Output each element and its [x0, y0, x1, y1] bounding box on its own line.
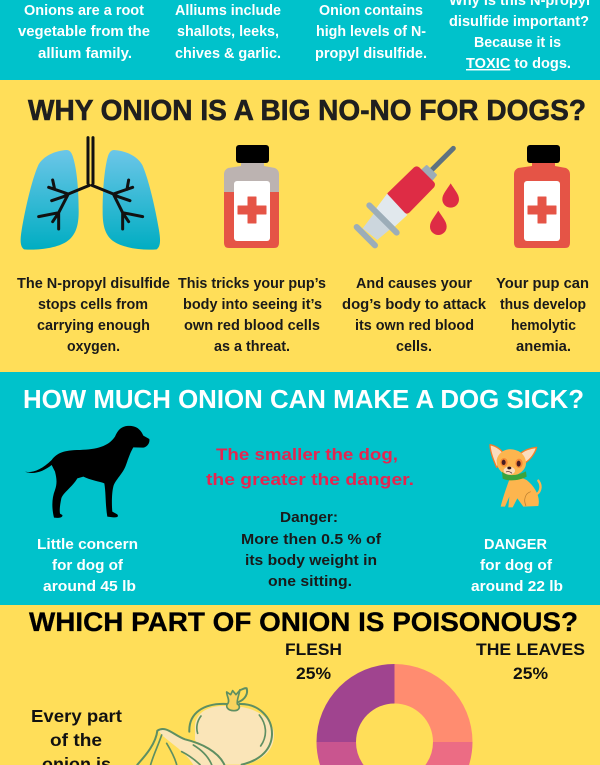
- text: body attacks red blood cells: And causes your: [356, 276, 472, 292]
- text: tricks the body: as a threat.: [214, 339, 290, 355]
- text: every part of the onion: of the: [50, 730, 102, 750]
- label: the leaves 25%: [476, 641, 585, 683]
- text: little concern: for dog of: [52, 558, 123, 574]
- icon: large dog silhouette: [25, 426, 149, 518]
- text: tricks the body: own red blood cells: [184, 318, 320, 334]
- text: danger for small dog: for dog of: [480, 558, 552, 574]
- text: danger amount: its body weight in: [245, 553, 377, 569]
- text: N-propyl disulfide fact: high levels of N-: [316, 24, 426, 40]
- text: stops cells carrying oxygen: carrying enough: [37, 318, 150, 334]
- text: alliums fact: shallots, leeks,: [177, 24, 279, 40]
- text: tricks the body: This tricks your pup’s: [178, 276, 326, 292]
- text: N-propyl disulfide fact: Onion contains: [319, 3, 423, 19]
- text: body attacks red blood cells: dog’s body to attack: [342, 297, 487, 313]
- icon: medicine bottle half full: [224, 145, 279, 248]
- callout: smaller dog greater danger: The smaller the dog,: [216, 445, 398, 464]
- text: alliums fact: Alliums include: [175, 3, 281, 19]
- text: N-propyl disulfide fact: propyl disulfide.: [315, 46, 427, 62]
- text: stops cells carrying oxygen: [17, 276, 170, 355]
- text: hemolytic anemia: [496, 276, 589, 355]
- text: root vegetable fact: [18, 3, 150, 62]
- text: why it is toxic: TOXIC to dogs.: [466, 56, 571, 72]
- text: danger amount: one sitting.: [268, 574, 352, 590]
- panel: how much onion: [0, 372, 600, 605]
- text: root vegetable fact: vegetable from the: [18, 24, 150, 40]
- icon: medicine bottle full: [514, 145, 570, 248]
- label: the leaves 25%: 25%: [513, 665, 548, 683]
- text: tricks the body: body into seeing it’s: [183, 297, 322, 313]
- text: body attacks red blood cells: [342, 276, 487, 355]
- text: root vegetable fact: Onions are a root: [24, 3, 144, 19]
- text: root vegetable fact: allium family.: [38, 46, 132, 62]
- text: hemolytic anemia: hemolytic: [511, 318, 576, 334]
- chart: onion parts donut: [316, 664, 472, 765]
- text: why it is toxic: disulfide important?: [449, 14, 589, 30]
- icon: lungs: [21, 138, 160, 250]
- text: hemolytic anemia: Your pup can: [496, 276, 589, 292]
- text: little concern: [37, 537, 138, 595]
- text: danger for small dog: DANGER: [484, 537, 548, 553]
- callout: smaller dog greater danger: the greater the danger.: [206, 470, 414, 489]
- text: danger amount: Danger:: [280, 510, 338, 526]
- text: little concern: Little concern: [37, 537, 138, 553]
- icon: chihuahua: [490, 445, 541, 507]
- heading: how much onion: HOW MUCH ONION CAN MAKE A DOG SICK?: [23, 384, 584, 414]
- label: flesh 25%: 25%: [296, 665, 331, 683]
- text: why it is toxic: Because it is: [474, 35, 561, 51]
- text: why it is toxic: [449, 0, 590, 72]
- text: danger amount: [241, 510, 381, 590]
- text: stops cells carrying oxygen: stops cells from: [38, 297, 148, 313]
- panel: why onion is bad: [0, 80, 600, 372]
- text: every part of the onion: Every part: [31, 706, 122, 726]
- label: the leaves 25%: THE LEAVES: [476, 641, 585, 659]
- panel: which part is poisonous: [0, 605, 600, 765]
- text: N-propyl disulfide fact: [315, 3, 427, 62]
- text: body attacks red blood cells: cells.: [396, 339, 432, 355]
- text: alliums fact: chives & garlic.: [175, 46, 281, 62]
- label: flesh 25%: FLESH: [285, 641, 342, 659]
- heading: which part of onion: WHICH PART OF ONION IS POISONOUS?: [29, 607, 578, 637]
- icon: syringe with blood drops: [357, 148, 459, 245]
- text: danger for small dog: [471, 537, 563, 595]
- label: flesh 25%: [285, 641, 342, 683]
- callout: smaller dog greater danger: [206, 445, 414, 489]
- text: danger for small dog: around 22 lb: [471, 579, 563, 595]
- text: hemolytic anemia: anemia.: [516, 339, 571, 355]
- text: stops cells carrying oxygen: The N-propyl disulfide: [17, 276, 170, 292]
- text: hemolytic anemia: thus develop: [500, 297, 586, 313]
- text: little concern: around 45 lb: [43, 579, 136, 595]
- text: danger amount: More then 0.5 % of: [241, 532, 381, 548]
- panel: onion facts: [0, 0, 600, 80]
- icon: onions: [137, 688, 274, 765]
- text: alliums fact: [175, 3, 281, 62]
- text: body attacks red blood cells: its own red blood: [355, 318, 474, 334]
- heading: why onion is a big no-no: WHY ONION IS A BIG NO-NO FOR DOGS?: [28, 95, 586, 127]
- text: tricks the body: [178, 276, 326, 355]
- text: stops cells carrying oxygen: oxygen.: [67, 339, 120, 355]
- text: every part of the onion: [31, 706, 122, 765]
